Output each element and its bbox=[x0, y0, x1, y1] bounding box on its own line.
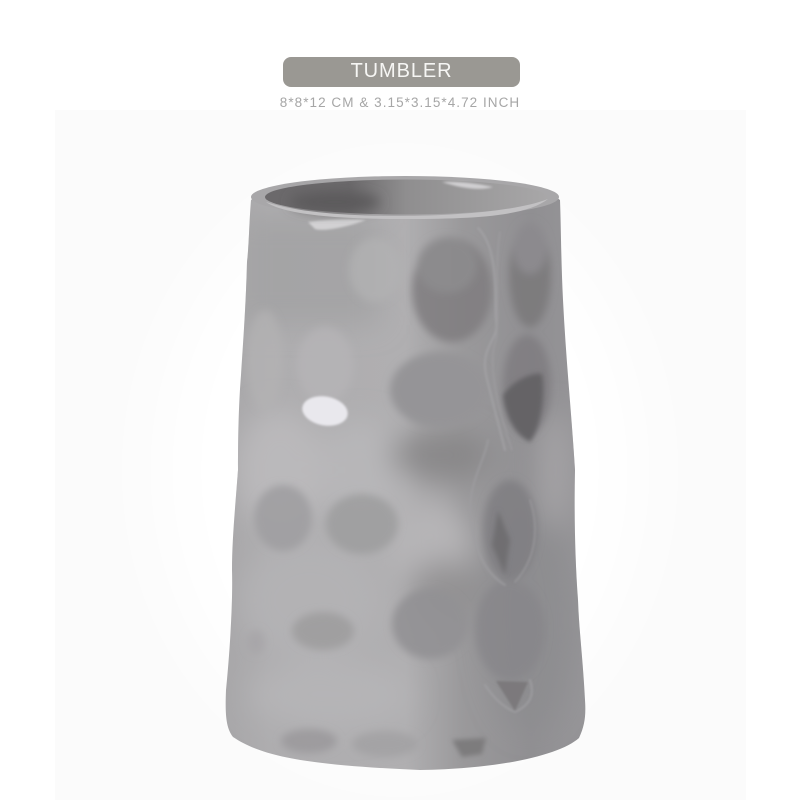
soft shading bbox=[237, 220, 578, 608]
dimensions text: 8*8*12 CM & 3.15*3.15*4.72 INCH bbox=[280, 95, 520, 110]
background panel bbox=[55, 110, 746, 800]
white reflections bbox=[300, 219, 366, 429]
tumbler body bbox=[226, 181, 585, 770]
white glow behind tumbler bbox=[160, 180, 640, 760]
tumbler rim and opening bbox=[251, 176, 559, 219]
glaze ridges bbox=[483, 242, 536, 712]
title badge: TUMBLER bbox=[283, 57, 520, 87]
small dark reflections bbox=[496, 681, 528, 711]
product photo: grey dimpled ceramic tumbler bbox=[226, 176, 586, 770]
title badge: TUMBLER: TUMBLER bbox=[351, 60, 452, 82]
dimples bbox=[247, 222, 551, 757]
